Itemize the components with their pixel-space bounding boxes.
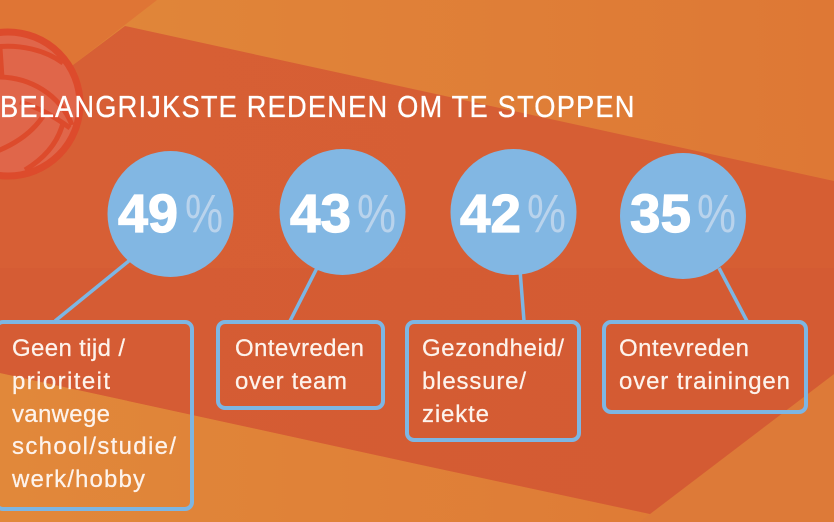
stat: 42%: % [527,184,566,244]
stat: 42%: 42 [460,184,521,244]
reason box: team: Ontevreden [235,335,364,362]
reason box: trainingen: over trainingen [619,368,790,395]
stat: 35%: % [697,184,736,244]
reason box: geen tijd: vanwege [12,401,110,428]
stat: 35%: 35 [630,184,691,244]
reason box: gezondheid: ziekte [422,401,489,428]
stat: 42% [450,149,576,275]
stat: 43%: 43 [290,184,351,244]
reason box: geen tijd: werk/hobby [11,466,145,493]
stat: 43% [280,149,406,275]
stat: 49%: 49 [118,184,178,244]
connector: 35% [719,268,747,321]
title: BELANGRIJKSTE REDENEN OM TE STOPPEN [0,90,634,124]
icon: volleyball [0,32,80,176]
connector: 42% [520,270,524,321]
stat: 43%: % [357,184,396,244]
reason box: geen tijd [0,322,192,509]
reason box: geen tijd: prioriteit [12,368,110,395]
connector: 49% [55,260,130,321]
connector: 43% [290,266,318,321]
stat: 49% [108,151,234,277]
reason box: team: over team [235,368,347,395]
reason box: gezondheid [407,322,579,440]
reason box: trainingen: Ontevreden [619,335,749,362]
reason box: trainingen [604,322,806,412]
stat: 49%: % [185,184,223,244]
reason box: gezondheid: Gezondheid/ [422,335,564,362]
reason box: team [218,322,383,408]
reason box: geen tijd: school/studie/ [12,433,176,460]
reason box: gezondheid: blessure/ [422,368,526,395]
reason box: geen tijd: Geen tijd / [12,335,125,362]
stat: 35% [620,153,746,279]
